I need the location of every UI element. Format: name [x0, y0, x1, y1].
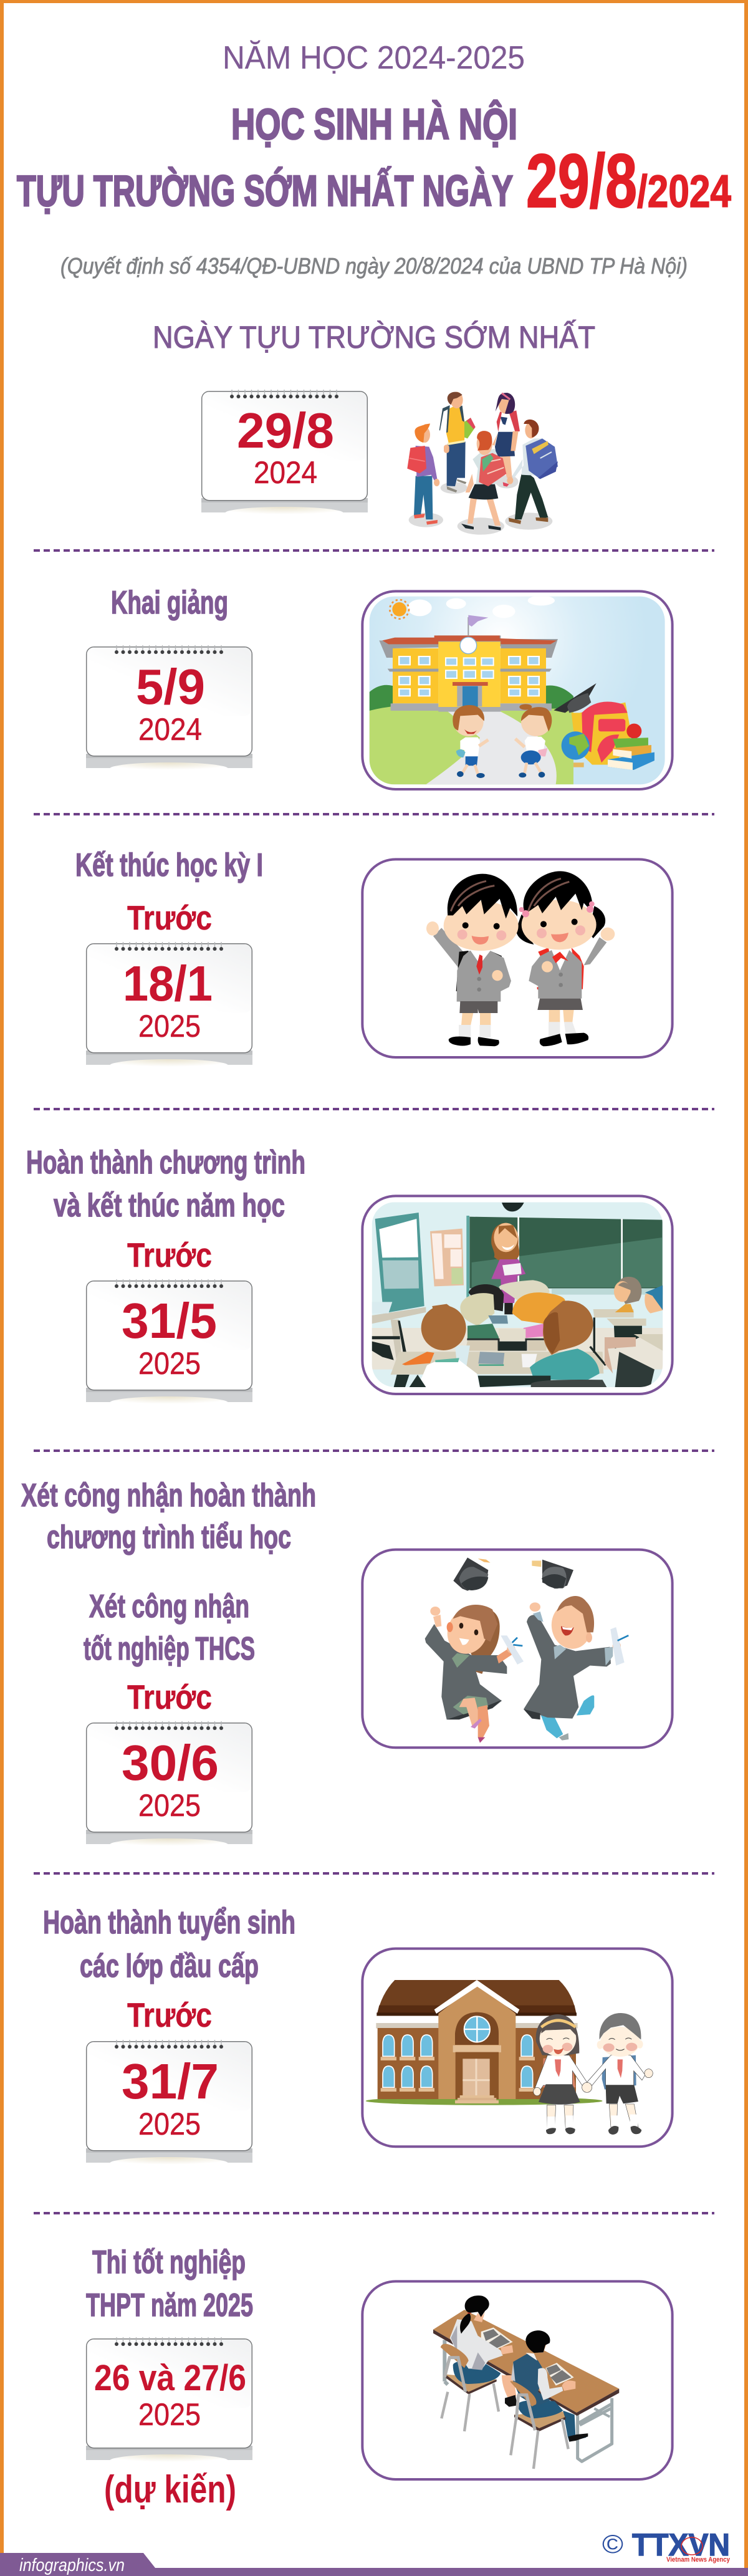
- illustration: group of students: [407, 392, 558, 535]
- panel: primary completion and lower-secondary graduation: [21, 1478, 673, 1851]
- calendar 18/1/2025: 18/1: [123, 956, 213, 1011]
- calendar 31/5/2025: 31/5: [122, 1293, 217, 1348]
- heading: Khai giảng: [111, 585, 228, 621]
- illustration: two pupils waving: [362, 859, 673, 1057]
- heading: [86, 2244, 253, 2324]
- panel: complete first-grade admissions: [43, 1905, 673, 2170]
- illustration: exam desk: [362, 2281, 673, 2479]
- panel: high-school graduation exam: [86, 2244, 673, 2511]
- calendar 30/6/2025: [86, 1721, 252, 1851]
- logo: TTXVN: TTXVN: [632, 2527, 730, 2562]
- divider: [34, 1872, 714, 1875]
- illustration: school and pupils: [362, 591, 673, 789]
- calendar 31/5/2025: [86, 1279, 252, 1409]
- calendar 29/8/2024: [201, 390, 368, 519]
- divider: [34, 1108, 714, 1110]
- before label: Trước: [127, 898, 212, 937]
- panel: end of semester 1: [75, 847, 673, 1072]
- divider: [34, 2212, 714, 2214]
- before label: Trước: [127, 1996, 212, 2034]
- expected label: (dự kiến): [104, 2468, 236, 2511]
- calendar 18/1/2025: 2025: [138, 1009, 201, 1044]
- illustration: graduates jumping: [362, 1550, 673, 1747]
- heading: và kết thúc năm học: [54, 1188, 285, 1224]
- heading: primary completion: chương trình tiểu học: [47, 1519, 291, 1555]
- website: infographics.vn: [19, 2555, 125, 2575]
- heading: NGÀY TỰU TRƯỜNG SỚM NHẤT: [153, 320, 595, 355]
- heading: Hoàn thành chương trình: [26, 1145, 305, 1181]
- title date: 29/8: [526, 138, 637, 223]
- panel: opening ceremony: [86, 585, 673, 789]
- calendar 18/1/2025: [86, 942, 252, 1072]
- divider: [34, 549, 714, 552]
- calendar 31/5/2025: 2025: [138, 1346, 201, 1381]
- heading: lower-secondary graduation: Xét công nhận: [89, 1588, 249, 1625]
- divider: [34, 1449, 714, 1452]
- calendar 31/7/2025: 31/7: [122, 2054, 219, 2109]
- panel: finish programme and school year: [26, 1145, 673, 1409]
- calendar 29/8/2024: 29/8: [237, 403, 334, 458]
- header: [17, 40, 731, 279]
- calendar 31/7/2025: 2025: [138, 2107, 201, 2141]
- title line 2: TỰU TRƯỜNG SỚM NHẤT NGÀY: [17, 166, 513, 215]
- before label: Trước: [127, 1678, 212, 1716]
- calendar 5/9/2024: 5/9: [136, 659, 205, 714]
- heading: Hoàn thành tuyển sinh: [43, 1905, 295, 1941]
- calendar 26 và 27/6/2025: [86, 2337, 252, 2467]
- heading: [26, 1145, 305, 1224]
- panel: earliest back-to-school day: [153, 320, 595, 535]
- calendar 30/6/2025: 30/6: [122, 1735, 219, 1790]
- heading: lower-secondary graduation: [84, 1588, 255, 1667]
- calendar 5/9/2024: 2024: [138, 712, 202, 747]
- calendar 26 và 27/6/2025: 26 và 27/6: [94, 2358, 246, 2398]
- year line: NĂM HỌC 2024-2025: [223, 40, 525, 76]
- heading: lower-secondary graduation: tốt nghiệp THCS: [84, 1631, 255, 1667]
- title year: /2024: [637, 166, 731, 217]
- logo: TTXVN: Vietnam News Agency: [666, 2556, 731, 2564]
- illustration: brown school and pupils: [362, 1949, 673, 2146]
- illustration: classroom: [362, 1196, 673, 1394]
- decision note: (Quyết định số 4354/QĐ-UBND ngày 20/8/2024 của UBND TP Hà Nội): [60, 253, 688, 279]
- heading: [43, 1905, 295, 1984]
- heading: Thi tốt nghiệp: [92, 2244, 246, 2280]
- heading: các lớp đầu cấp: [80, 1948, 259, 1984]
- calendar 30/6/2025: 2025: [138, 1788, 201, 1823]
- heading: Kết thúc học kỳ I: [75, 847, 263, 883]
- before label: Trước: [127, 1236, 212, 1274]
- divider: [34, 813, 714, 815]
- heading: primary completion: [21, 1478, 316, 1555]
- title line 1: HỌC SINH HÀ NỘI: [231, 99, 517, 148]
- logo: TTXVN: ©: [602, 2529, 623, 2559]
- heading: primary completion: Xét công nhận hoàn thành: [21, 1478, 316, 1514]
- calendar 31/7/2025: [86, 2040, 252, 2170]
- calendar 5/9/2024: [86, 645, 252, 775]
- heading: THPT năm 2025: [86, 2287, 253, 2324]
- calendar 26 và 27/6/2025: 2025: [138, 2397, 201, 2432]
- footer bar: [0, 2553, 748, 2576]
- calendar 29/8/2024: 2024: [254, 455, 317, 490]
